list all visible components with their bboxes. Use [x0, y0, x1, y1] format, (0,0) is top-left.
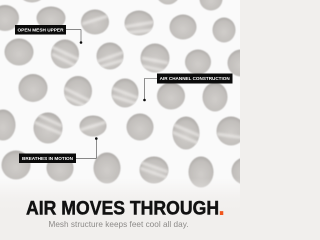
callout: open mesh upper: OPEN MESH UPPER: [18, 27, 64, 32]
mesh background photo: [0, 0, 240, 188]
title: AIR MOVES THROUGH.: [26, 197, 224, 219]
callout: breathes in motion: [19, 137, 98, 163]
callout: air channel construction: [143, 74, 232, 101]
bottom fade: [0, 178, 240, 210]
callout: breathes in motion: BREATHES IN MOTION: [22, 156, 73, 161]
callout: open mesh upper: [15, 25, 82, 44]
infographic canvas: [0, 0, 240, 229]
light fibre streaks in holes: [34, 16, 245, 178]
subtitle: Mesh structure keeps feet cool all day.: [48, 220, 188, 229]
callout: air channel construction: AIR CHANNEL CONSTRUCTION: [160, 76, 230, 81]
